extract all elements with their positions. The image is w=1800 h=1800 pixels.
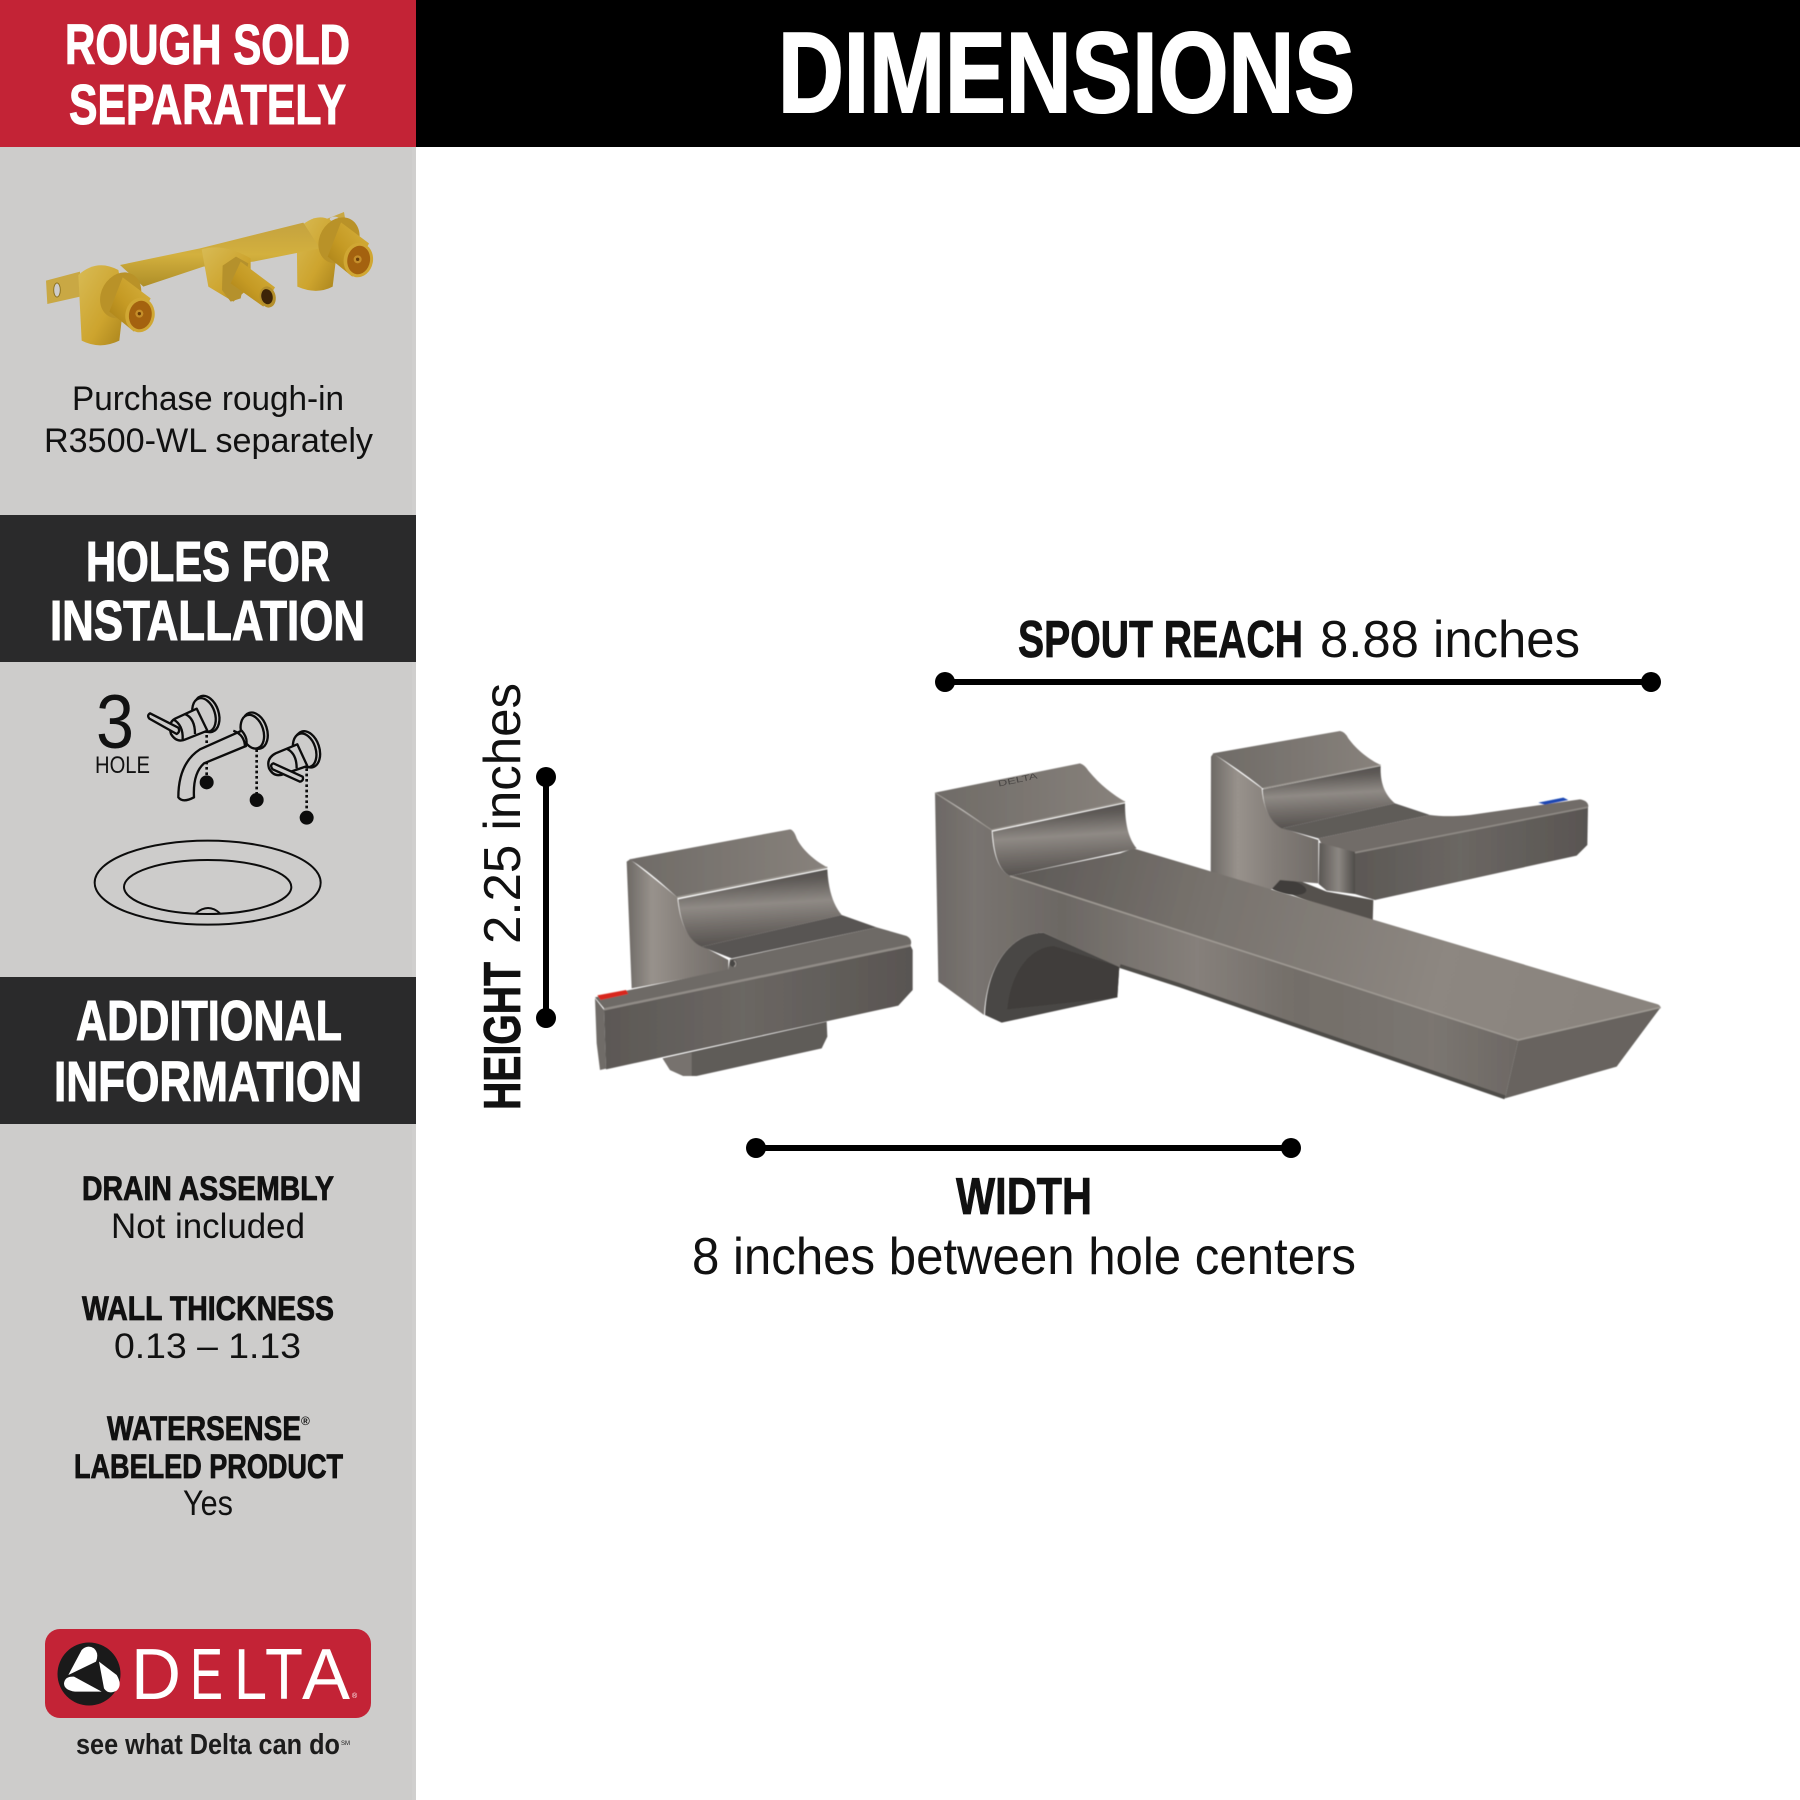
dimension: width: 8 inches between hole centers: [692, 1228, 1356, 1286]
text: watersense labeled product: ®: [301, 1414, 310, 1428]
text: watersense labeled product: LABELED PRODUCT: [74, 1448, 343, 1486]
text: watersense labeled product: [74, 1410, 343, 1523]
text: purchase rough-in: Purchase rough-in: [72, 380, 344, 418]
title banner: dimensions: DIMENSIONS: [778, 10, 1355, 137]
text: purchase rough-in: R3500-WL separately: [44, 422, 373, 460]
logo: delta: [45, 1629, 371, 1718]
dimension: spout reach: SPOUT REACH: [1018, 611, 1303, 669]
logo: delta: T: [265, 1635, 303, 1715]
text: wall thickness: 0.13 – 1.13: [114, 1327, 301, 1366]
icon: three hole faucet and basin: HOLE: [95, 752, 150, 779]
faucet: left handle: [595, 829, 913, 1076]
heading: holes for installation: [0, 515, 416, 662]
heading: rough sold separately: ROUGH SOLD: [65, 13, 350, 77]
icon: brass rough-in valve: [46, 210, 376, 345]
icon: three hole faucet and basin: 3: [96, 680, 134, 765]
faucet: right handle: [1211, 731, 1588, 923]
text: wall thickness: WALL THICKNESS: [82, 1290, 334, 1328]
dimension: width: [692, 1138, 1356, 1286]
heading: additional information: ADDITIONAL: [76, 989, 342, 1053]
icon: three hole faucet and basin: [95, 680, 325, 925]
dimension: height: 2.25 inches: [474, 683, 532, 944]
dimension: height: HEIGHT: [474, 962, 532, 1110]
title banner: dimensions: [416, 0, 1800, 147]
text: drain assembly: Not included: [111, 1207, 305, 1246]
dimension: height: [474, 683, 556, 1110]
arrow: height line: [536, 767, 556, 1028]
logo: delta: D: [131, 1635, 181, 1715]
text: watersense labeled product: Yes: [183, 1484, 233, 1523]
logo: delta: A: [302, 1635, 350, 1715]
tagline: see what delta can do: see what Delta can do: [76, 1729, 340, 1761]
heading: additional information: INFORMATION: [54, 1050, 362, 1114]
heading: rough sold separately: SEPARATELY: [69, 73, 346, 137]
heading: holes for installation: HOLES FOR: [86, 530, 330, 594]
faucet: centre spout: [935, 763, 1661, 1098]
text: watersense labeled product: WATERSENSE: [107, 1410, 301, 1448]
heading: rough sold separately: [0, 0, 416, 147]
text: purchase rough-in: [44, 380, 373, 460]
logo: delta: L: [234, 1635, 267, 1715]
tagline: see what delta can do: SM: [341, 1741, 350, 1747]
dimension: spout reach: 8.88 inches: [1320, 611, 1580, 669]
dimension: spout reach: [935, 611, 1661, 692]
dimension: width: WIDTH: [956, 1168, 1092, 1226]
logo: delta: ®: [352, 1692, 358, 1700]
heading: additional information: [0, 977, 416, 1124]
sidebar panel: [0, 0, 416, 1800]
arrow: width line: [746, 1138, 1301, 1158]
text: drain assembly: DRAIN ASSEMBLY: [82, 1170, 334, 1208]
heading: holes for installation: INSTALLATION: [50, 589, 365, 653]
logo: delta: E: [190, 1635, 223, 1715]
text: drain assembly: [82, 1170, 334, 1246]
arrow: spout reach line: [935, 672, 1661, 692]
text: wall thickness: [82, 1290, 334, 1366]
spout engraving: delta: DELTA: [997, 770, 1039, 789]
